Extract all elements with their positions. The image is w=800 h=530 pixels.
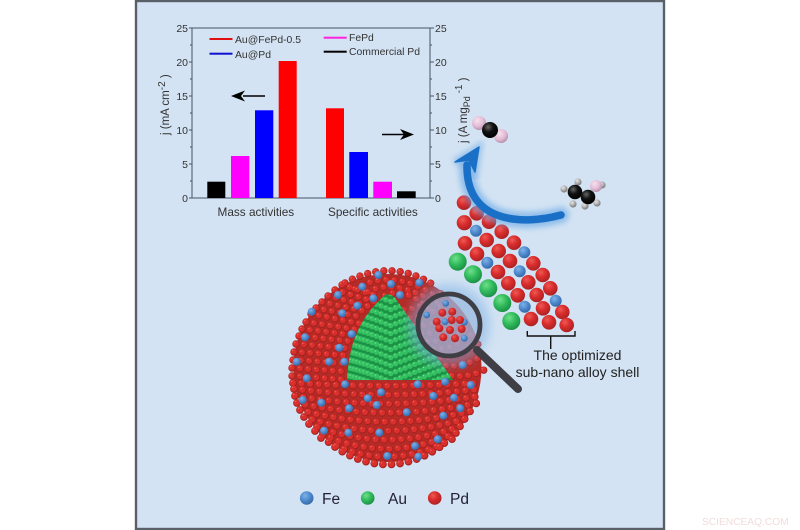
- core-shell nanoparticle: [291, 269, 484, 464]
- right axis title: j (A mg: [458, 107, 470, 143]
- arrow: right axis: [382, 129, 414, 140]
- left axis tick labels: 5: [182, 159, 188, 171]
- x axis labels: Mass activities: [218, 205, 294, 219]
- right axis title: -1: [454, 84, 465, 96]
- right axis tick labels: 25: [435, 23, 447, 35]
- element legend: Fe: [322, 491, 340, 508]
- icon: magnifying glass: [408, 284, 518, 389]
- caption: optimized shell: [516, 347, 639, 380]
- chart axes: [189, 28, 434, 198]
- right axis title: Pd: [462, 96, 472, 107]
- arrow: curved blue reaction arrow: [455, 147, 561, 220]
- left axis title: j (mA cm: [160, 90, 172, 135]
- right axis tick labels: 5: [435, 159, 441, 171]
- iron atoms on surface: [293, 271, 475, 461]
- gold core wedge: [347, 294, 453, 380]
- x axis labels: Specific activities: [328, 205, 418, 219]
- left axis tick labels: [176, 23, 188, 205]
- legend: [210, 33, 420, 61]
- lower hemisphere palladium rows: [292, 381, 482, 464]
- left axis tick labels: 25: [176, 23, 188, 35]
- left axis tick labels: 20: [176, 57, 188, 69]
- lens ring: [418, 294, 480, 356]
- molecule: product: [472, 116, 508, 143]
- watermark: SCIENCEAQ.COM: [702, 517, 789, 528]
- left axis tick labels: 10: [176, 125, 188, 137]
- handle: [477, 350, 518, 389]
- bracket: [527, 331, 575, 349]
- right axis tick labels: 20: [435, 57, 447, 69]
- right axis tick labels: 10: [435, 125, 447, 137]
- caption: optimized shell: sub-nano alloy shell: [516, 364, 639, 380]
- legend: Au@Pd: [235, 50, 271, 61]
- bars: mass activities: [207, 61, 297, 198]
- arrow: left axis: [231, 90, 265, 102]
- bars: specific activities: [326, 108, 416, 198]
- left axis tick labels: 15: [176, 91, 188, 103]
- caption: optimized shell: The optimized: [534, 347, 621, 363]
- legend: Commercial Pd: [349, 47, 420, 58]
- bar chart: [157, 23, 472, 219]
- left axis title: ): [160, 74, 172, 81]
- atomic chain: shell close-up: [449, 195, 574, 332]
- element legend: Pd: [450, 491, 469, 508]
- element legend: [300, 491, 469, 508]
- panel: background: [136, 1, 664, 529]
- legend: Au@FePd-0.5: [235, 35, 301, 46]
- right axis tick labels: 15: [435, 91, 447, 103]
- right axis tick labels: 0: [435, 193, 441, 205]
- element legend: Au: [388, 491, 407, 508]
- x axis labels: [218, 205, 418, 219]
- left axis title: -2: [157, 81, 168, 90]
- lens contents: shell atoms: [423, 300, 468, 342]
- right axis tick labels: [435, 23, 447, 205]
- legend: FePd: [349, 33, 374, 44]
- left axis tick labels: 0: [182, 193, 188, 205]
- molecule: reactant: [560, 178, 606, 210]
- right axis title: ): [458, 77, 470, 85]
